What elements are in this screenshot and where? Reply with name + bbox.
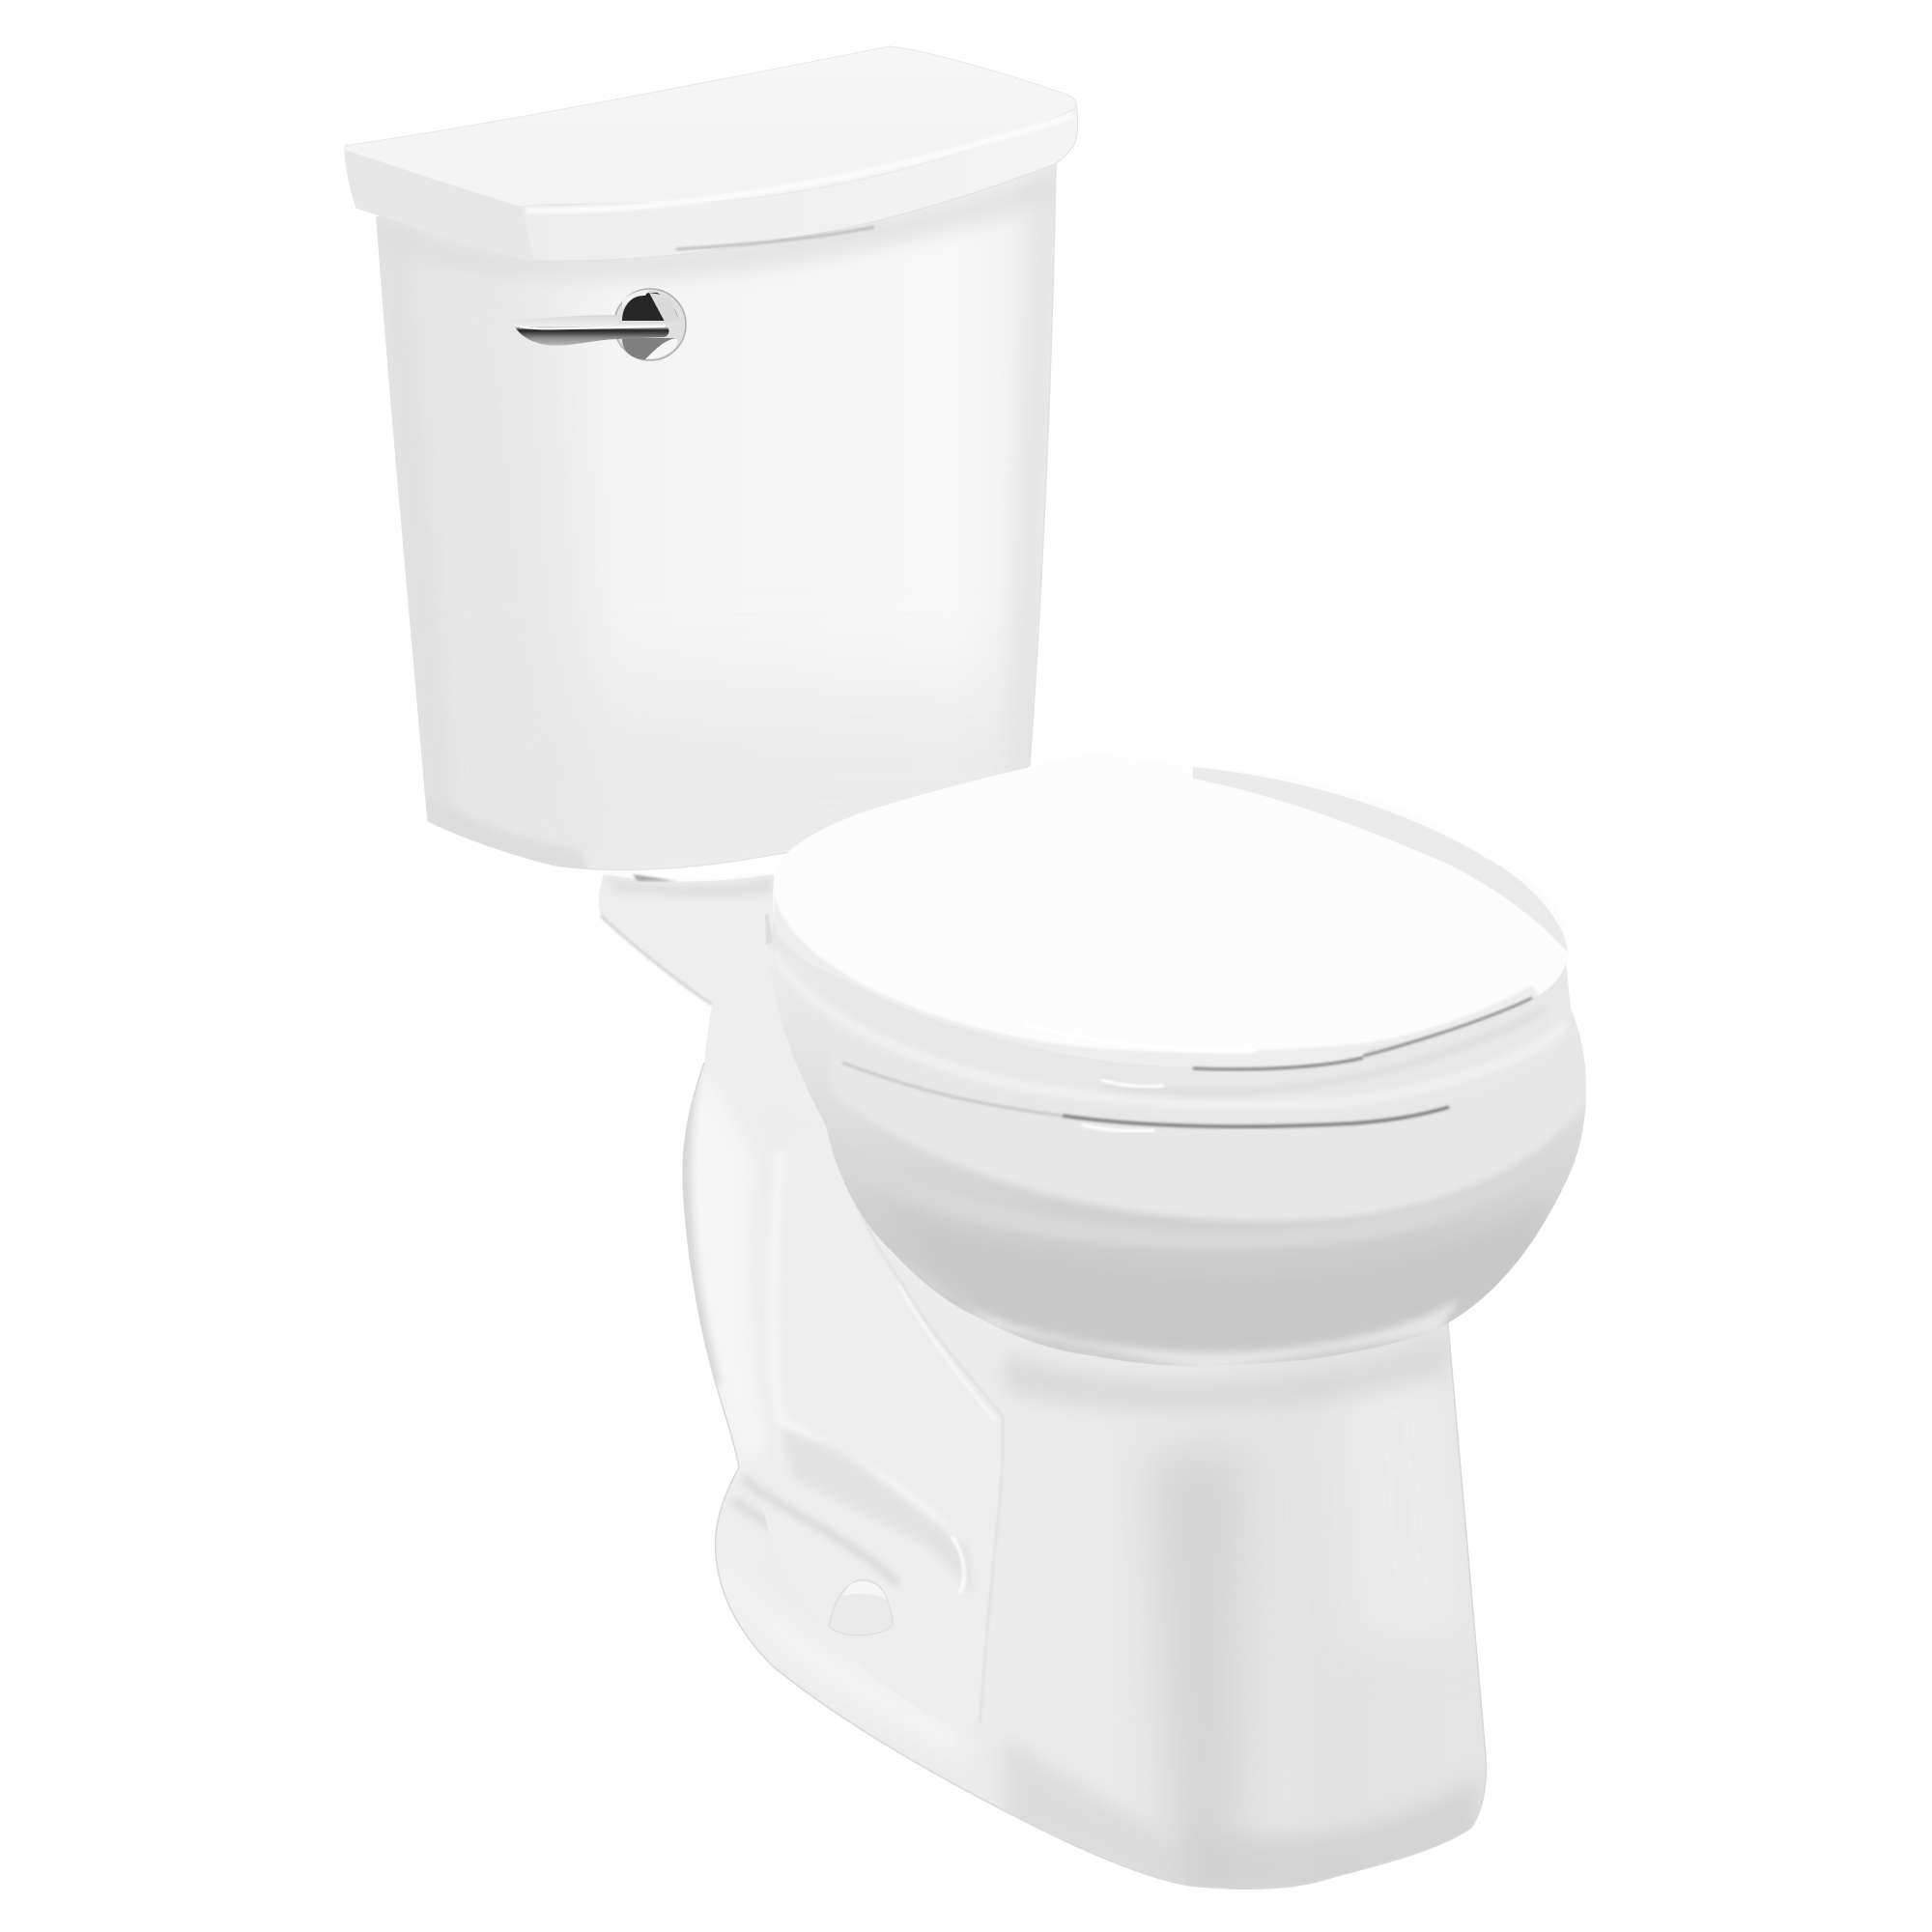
- floor bolt cap: [829, 1580, 893, 1635]
- side recess of base: [744, 1128, 1003, 1722]
- illustration: two-piece toilet product photo: [344, 46, 1586, 1889]
- bowl upper rim band: [848, 1089, 1586, 1223]
- trapway neck under tank: [599, 874, 869, 1169]
- tank lid: [345, 46, 1078, 261]
- lid top surface: [345, 46, 1076, 207]
- seat cover lid: [765, 753, 1568, 1072]
- tank body: [377, 159, 1082, 908]
- bowl: [784, 1009, 1586, 1366]
- finger notch: [1363, 998, 1532, 1056]
- lid front edge: [345, 104, 1078, 261]
- pedestal base: [679, 1063, 1488, 1908]
- lever rosette: [614, 289, 686, 360]
- seat ring: [768, 889, 1572, 1126]
- lever handle: [512, 315, 668, 346]
- flush lever: [512, 289, 686, 360]
